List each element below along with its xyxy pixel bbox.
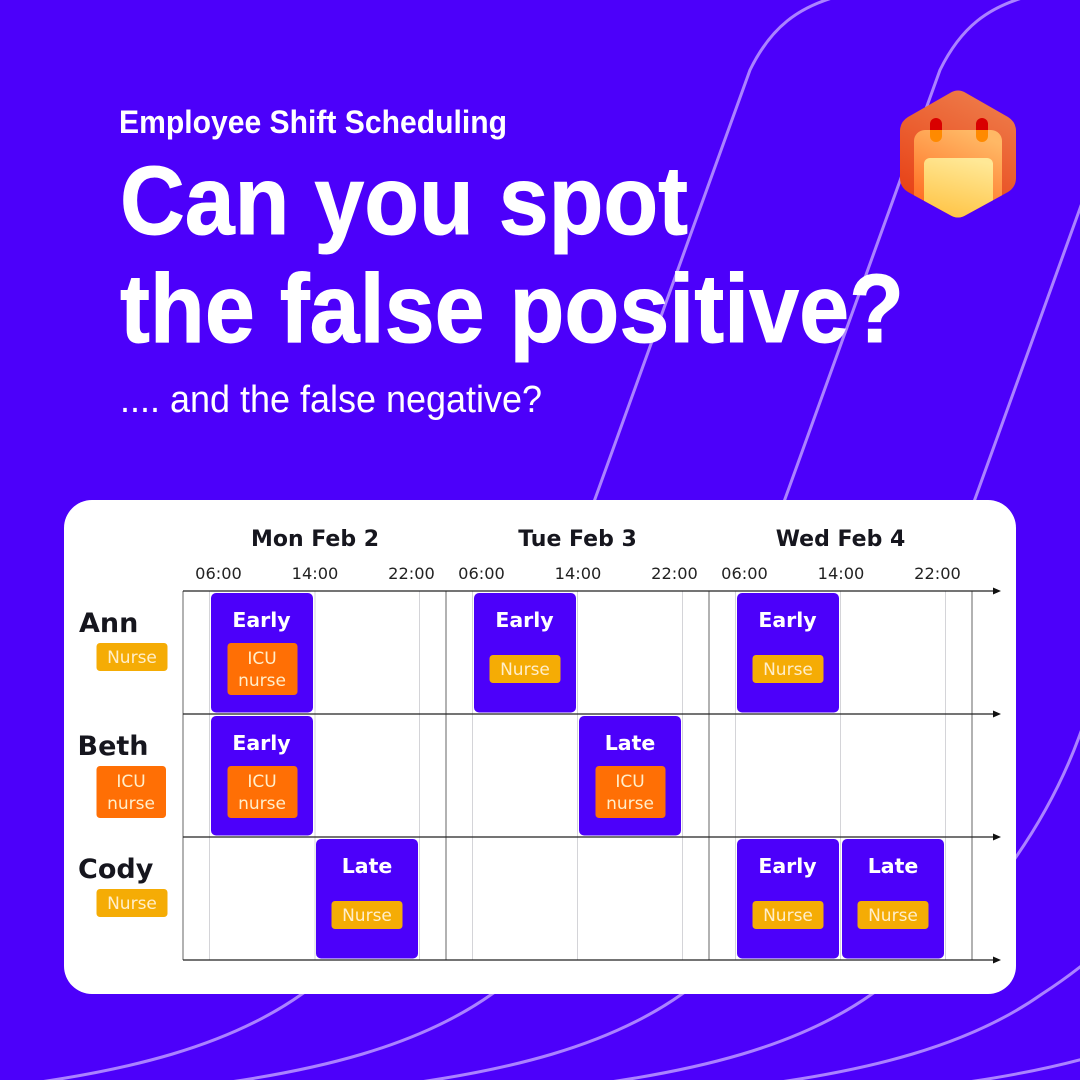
shift: Ann Wed Early [737,593,839,712]
time axis labels: 06:00 [458,564,505,583]
panel: schedule card [64,500,1016,994]
time axis labels: 06:00 [195,564,242,583]
time axis labels: 14:00 [818,564,864,583]
employee: Ann: Ann [79,608,138,639]
employee: Cody: Nurse [107,894,157,914]
main title [120,146,904,363]
shift: Ann Mon Early: ICU [247,649,277,669]
main title: Can you spot [120,146,688,255]
shift: Ann Tue Early: Early [495,608,554,632]
employee: Ann: Nurse [107,648,157,668]
main title: the false positive? [120,254,904,363]
shift: Beth Tue Late [579,716,681,836]
day headers [251,527,905,552]
shift: Cody Mon Late [316,839,418,958]
shift: Cody Mon Late: Nurse [342,906,392,926]
shift: Ann Wed Early: Nurse [763,660,813,680]
shift: Beth Tue Late: nurse [606,794,654,814]
shift: Beth Mon Early: Early [232,731,291,755]
employee: Cody: Cody [78,854,154,885]
time axis labels: 06:00 [721,564,768,583]
shift: Ann Wed Early: Early [758,608,817,632]
shift: Cody Wed Early: Early [758,854,817,878]
employee: Beth: ICU [116,772,146,792]
day headers: Tue Feb 3 [518,527,637,552]
shift: Beth Tue Late: Late [605,731,655,755]
shift: Ann Tue Early: Nurse [500,660,550,680]
time axis labels: 22:00 [651,564,698,583]
shift: Cody Wed Late [842,839,944,958]
shift: Ann Mon Early: Early [232,608,291,632]
shift: Cody Wed Early: Nurse [763,906,813,926]
shift: Beth Tue Late: ICU [615,772,645,792]
axis arrowheads [993,588,1001,964]
day headers: Wed Feb 4 [776,527,905,552]
employee: Cody [78,854,168,917]
icon: calendar hexagon [900,90,1016,230]
shift: Beth Mon Early: nurse [238,794,286,814]
shift: Ann Tue Early [474,593,576,712]
employee: Beth: nurse [107,794,155,814]
day headers: Mon Feb 2 [251,527,379,552]
subtitle: .... and the false negative? [120,379,542,421]
time axis labels: 22:00 [388,564,435,583]
employee: Beth [78,731,166,818]
shift: Cody Wed Late: Late [868,854,918,878]
time axis labels [195,564,961,583]
time axis labels: 14:00 [555,564,601,583]
shift: Ann Mon Early [211,593,313,712]
shift: Cody Wed Late: Nurse [868,906,918,926]
employee: Beth: Beth [78,731,149,762]
shift: Ann Mon Early: nurse [238,671,286,691]
time axis labels: 22:00 [914,564,961,583]
shift: Cody Wed Early [737,839,839,958]
eyebrow heading: Employee Shift Scheduling [119,104,507,140]
shift: Beth Mon Early [211,716,313,836]
time axis labels: 14:00 [292,564,338,583]
shift: Cody Mon Late: Late [342,854,392,878]
employee: Ann [79,608,168,671]
shift: Beth Mon Early: ICU [247,772,277,792]
